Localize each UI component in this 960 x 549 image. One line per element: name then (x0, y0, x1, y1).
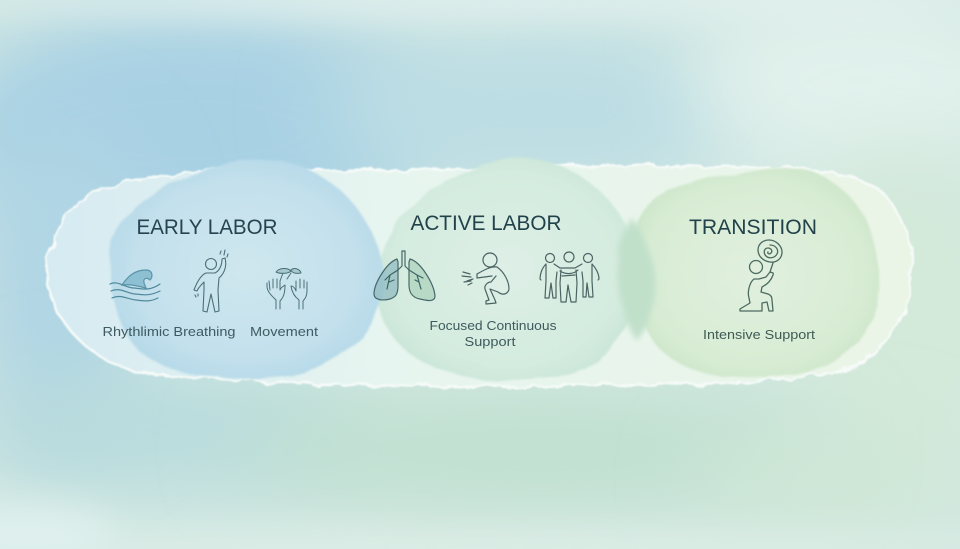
panel: transition wash (631, 169, 880, 379)
label: focused continuous support: Focused Continuous (430, 318, 557, 333)
heading: active labor: ACTIVE LABOR (410, 212, 562, 235)
icon: three people supporting (540, 252, 599, 302)
icon: wave (110, 270, 160, 301)
label: rhythmic breathing: Rhythlimic Breathing (102, 324, 236, 339)
panel: active labor wash (375, 158, 640, 380)
label: support line two: Support (464, 334, 516, 349)
icon: kneeling figure with spiral (740, 240, 782, 311)
panel: early labor wash (110, 159, 382, 379)
overlap wash between active and transition (617, 218, 655, 342)
icon: lungs (374, 251, 435, 301)
label: movement: Movement (250, 324, 318, 339)
torn paper strip (46, 165, 912, 387)
heading: transition: TRANSITION (689, 216, 817, 239)
icon: person raising arm (194, 250, 228, 312)
label: intensive support: Intensive Support (703, 327, 815, 342)
icon: open hands with mushroom (267, 268, 307, 309)
heading: early labor: EARLY LABOR (136, 216, 278, 239)
icon: squatting person (462, 253, 509, 304)
